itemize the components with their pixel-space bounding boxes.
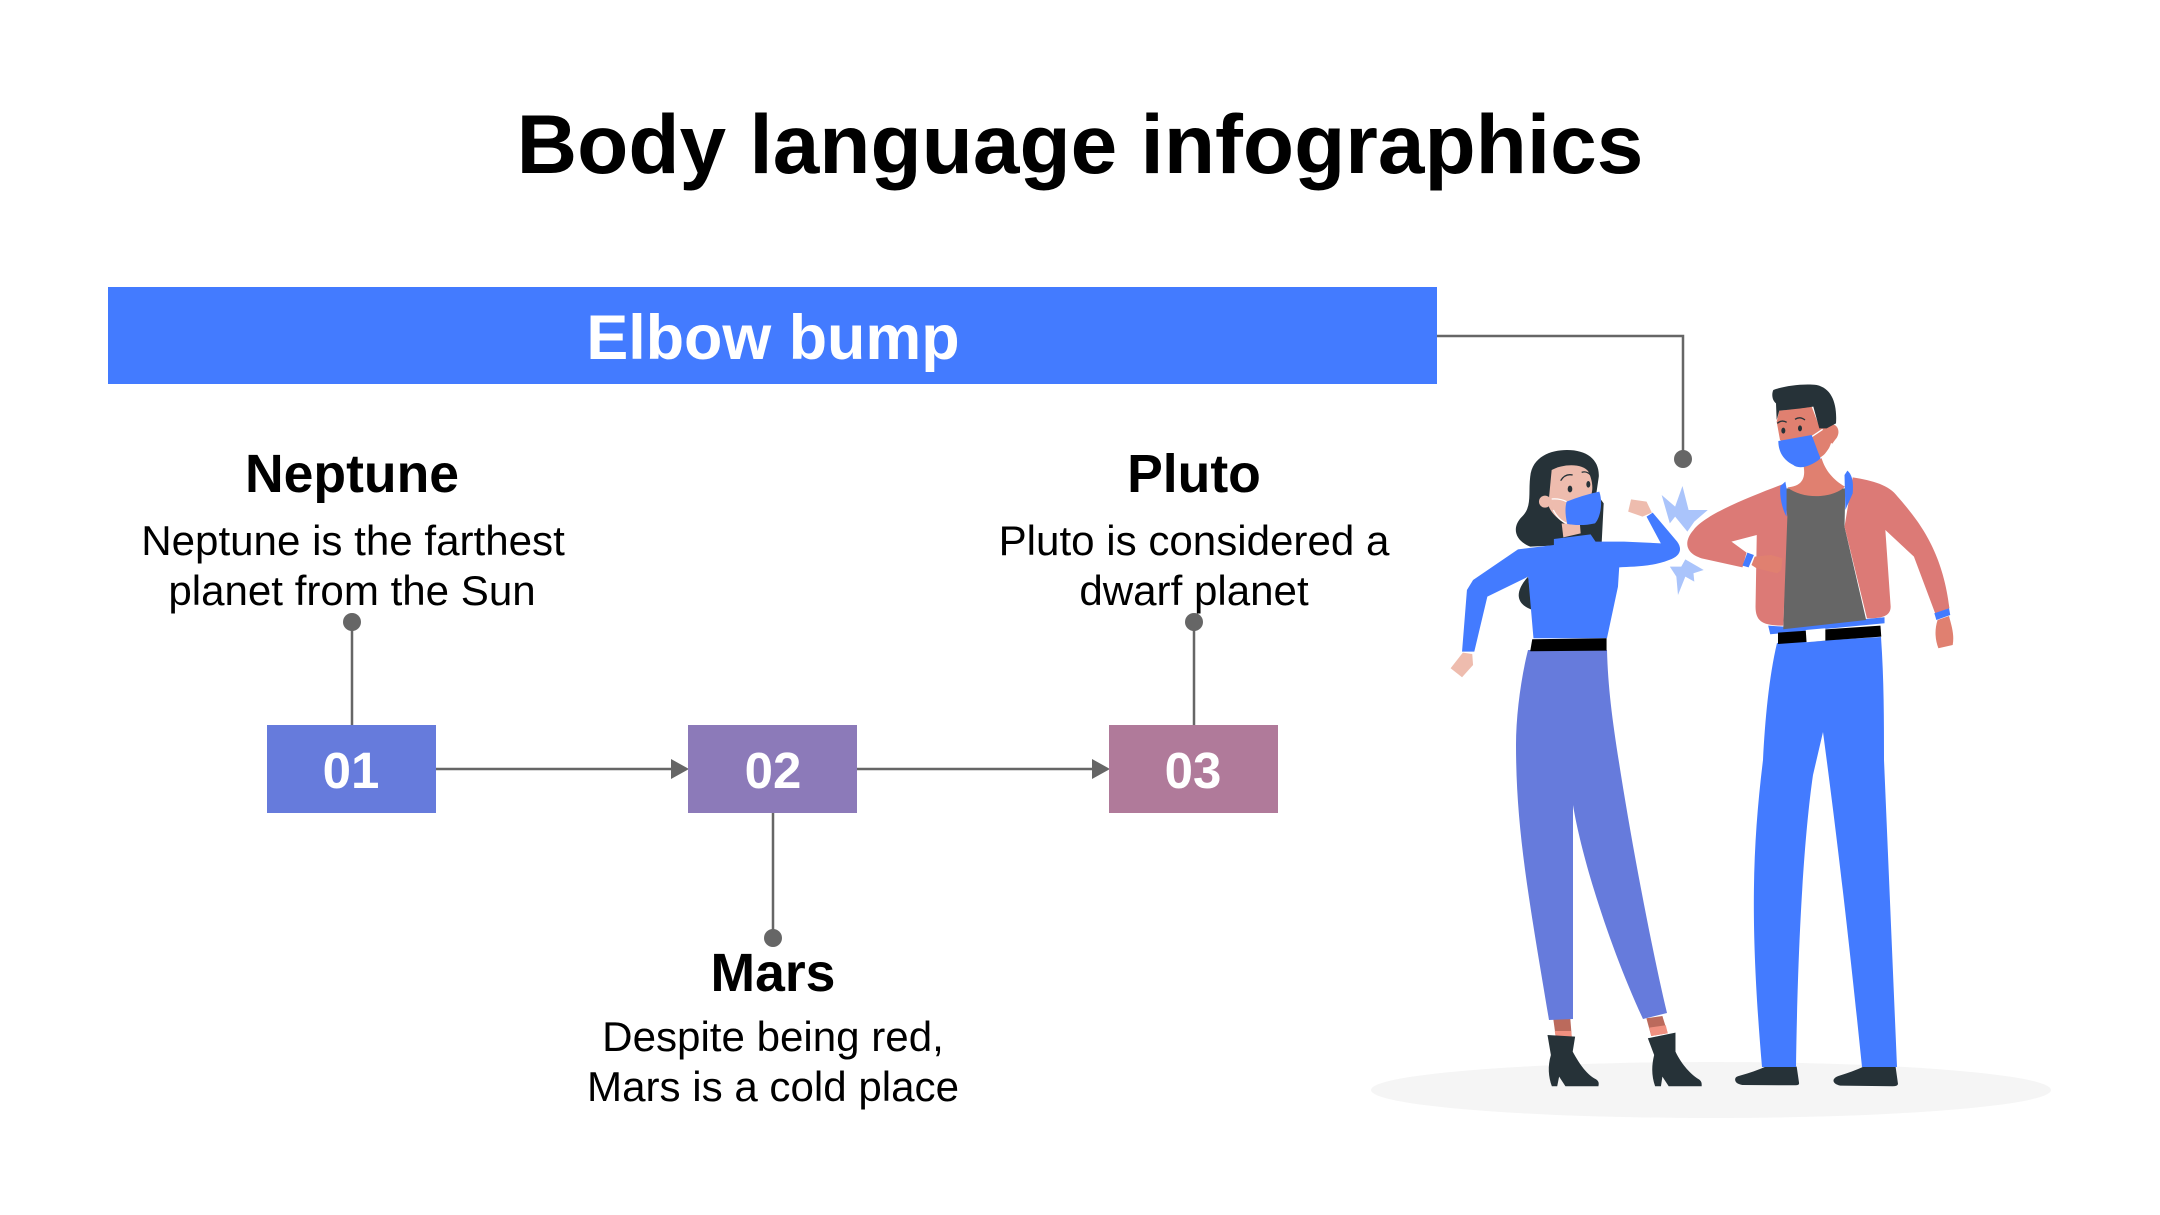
woman figure (1451, 450, 1702, 1086)
text block: Neptune: Neptune (245, 445, 459, 504)
text block: Mars: Despite being red, (602, 1013, 944, 1060)
arrow: step 02 to step 03 (857, 759, 1110, 779)
text block: Pluto: dwarf planet (1079, 567, 1309, 614)
text block: Pluto (999, 445, 1390, 614)
icon: impact sparks (1662, 486, 1708, 595)
step box 01: 01 (323, 742, 379, 799)
text block: Pluto: Pluto (1127, 445, 1261, 504)
arrow: step 01 to step 02 (436, 759, 689, 779)
connector: Neptune to step 01 (343, 613, 361, 725)
connector: step 02 to Mars (764, 813, 782, 947)
step box 03 (1109, 725, 1278, 813)
text block: Neptune: planet from the Sun (168, 567, 536, 614)
text block: Mars (587, 944, 959, 1110)
step box 01 (267, 725, 436, 813)
connector: Pluto to step 03 (1185, 613, 1203, 725)
text block: Neptune: Neptune is the farthest (141, 517, 565, 564)
title: Body language infographics (517, 97, 1643, 191)
connector: bar to illustration (1437, 336, 1692, 468)
text block: Neptune (141, 445, 565, 614)
man figure (1687, 384, 1953, 1086)
text block: Mars: Mars (711, 944, 835, 1003)
step box 02 (688, 725, 857, 813)
illustration: two people elbow bumping (1371, 384, 2051, 1118)
ground shadow (1371, 1062, 2051, 1118)
step box 03: 03 (1165, 742, 1221, 799)
header bar: Elbow bump: Elbow bump (586, 303, 960, 373)
step box 02: 02 (745, 742, 801, 799)
header bar: Elbow bump (108, 287, 1437, 384)
text block: Pluto: Pluto is considered a (999, 517, 1390, 564)
text block: Mars: Mars is a cold place (587, 1063, 959, 1110)
